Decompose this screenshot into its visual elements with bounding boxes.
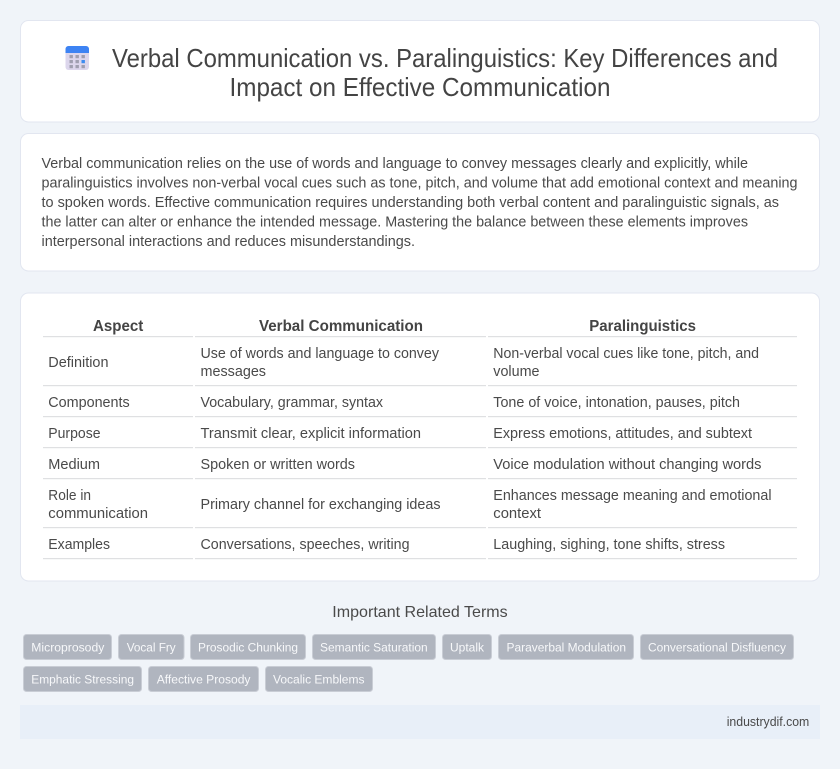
tag: Conversational Disfluency bbox=[640, 634, 794, 660]
tag: Emphatic Stressing: Emphatic Stressing bbox=[31, 672, 134, 686]
row: definition: Non-verbal vocal cues like tone, pitch, and bbox=[493, 346, 759, 362]
panel: introduction text: interpersonal interactions and reduces misunderstandings. bbox=[42, 234, 415, 250]
row: medium: Medium bbox=[48, 457, 100, 473]
row: purpose: Express emotions, attitudes, and subtext bbox=[493, 426, 752, 442]
row: role in communication: communication bbox=[48, 506, 148, 522]
row: definition: volume bbox=[493, 364, 540, 380]
tag: Microprosody bbox=[24, 634, 112, 660]
tag: Affective Prosody bbox=[148, 666, 258, 692]
row: components bbox=[48, 395, 740, 411]
tag: Conversational Disfluency: Conversational Disfluency bbox=[648, 640, 787, 654]
table header: Verbal Communication bbox=[259, 318, 423, 335]
title: Verbal Communication vs. Paralinguistics: Key Differences and bbox=[112, 45, 778, 73]
tag: Uptalk bbox=[442, 634, 492, 660]
tag: Uptalk: Uptalk bbox=[450, 640, 485, 654]
table header: Paralinguistics bbox=[589, 318, 696, 335]
table header bbox=[93, 318, 696, 335]
tags: related terms bbox=[24, 634, 794, 692]
row: examples: Laughing, sighing, tone shifts, stress bbox=[493, 537, 725, 553]
footer bar: industrydif.com bbox=[727, 714, 809, 729]
panel: introduction text: to spoken words. Effective communication requires understanding both verbal content and paralinguistic signals, as bbox=[42, 195, 779, 211]
footer bar bbox=[20, 705, 820, 739]
panel: introduction text bbox=[20, 134, 820, 271]
row: medium: Spoken or written words bbox=[200, 457, 355, 473]
icon: calendar bbox=[66, 46, 89, 70]
row: role in communication: Primary channel for exchanging ideas bbox=[200, 497, 440, 513]
tag: Paraverbal Modulation bbox=[498, 634, 634, 660]
row: role in communication: Enhances message meaning and emotional bbox=[493, 488, 772, 504]
row: medium bbox=[48, 457, 762, 473]
row: purpose: Purpose bbox=[48, 426, 100, 442]
row: definition bbox=[48, 346, 759, 380]
row: examples: Conversations, speeches, writing bbox=[200, 537, 410, 553]
tag: Emphatic Stressing bbox=[24, 666, 142, 692]
row: components: Tone of voice, intonation, pauses, pitch bbox=[493, 395, 740, 411]
title: Impact on Effective Communication bbox=[230, 74, 610, 102]
row: role in communication: context bbox=[493, 506, 541, 522]
row: components: Vocabulary, grammar, syntax bbox=[200, 395, 384, 411]
tag: Prosodic Chunking bbox=[190, 634, 306, 660]
panel: header bbox=[20, 20, 820, 122]
tag: Vocalic Emblems: Vocalic Emblems bbox=[273, 672, 364, 686]
panel: introduction text: the latter can alter or enhance the intended message. Mastering the balance between these elements improves bbox=[42, 214, 748, 230]
tag: Paraverbal Modulation: Paraverbal Modulation bbox=[506, 640, 626, 654]
row: definition: messages bbox=[200, 364, 266, 380]
row: examples: Examples bbox=[48, 537, 110, 553]
row: examples bbox=[48, 537, 725, 553]
tag: Vocalic Emblems bbox=[266, 666, 372, 692]
tag: Affective Prosody: Affective Prosody bbox=[157, 672, 251, 686]
row: role in communication: Role in bbox=[48, 488, 91, 504]
row: purpose: Transmit clear, explicit information bbox=[200, 426, 421, 442]
panel: introduction text: paralinguistics involves non-verbal vocal cues such as tone, pitch, and volume that add emotional context and meaning bbox=[42, 176, 798, 192]
tag: Semantic Saturation: Semantic Saturation bbox=[320, 640, 428, 654]
table header: Aspect bbox=[93, 318, 144, 335]
tag: Vocal Fry bbox=[118, 634, 184, 660]
tag: Microprosody: Microprosody bbox=[31, 640, 105, 654]
tag: Prosodic Chunking: Prosodic Chunking bbox=[198, 640, 298, 654]
row: medium: Voice modulation without changing words bbox=[493, 457, 762, 473]
row: purpose bbox=[48, 426, 752, 442]
panel: comparison table bbox=[20, 293, 820, 581]
row: role in communication bbox=[48, 488, 772, 522]
title bbox=[112, 45, 778, 102]
row: components: Components bbox=[48, 395, 130, 411]
heading: important related terms: Important Related Terms bbox=[332, 604, 508, 621]
row: definition: Definition bbox=[48, 355, 108, 371]
tag: Vocal Fry: Vocal Fry bbox=[127, 640, 176, 654]
panel: introduction text: Verbal communication relies on the use of words and language to convey messages clearly and explicitly, while bbox=[42, 156, 748, 172]
tag: Semantic Saturation bbox=[312, 634, 436, 660]
row: definition: Use of words and language to convey bbox=[200, 346, 440, 362]
